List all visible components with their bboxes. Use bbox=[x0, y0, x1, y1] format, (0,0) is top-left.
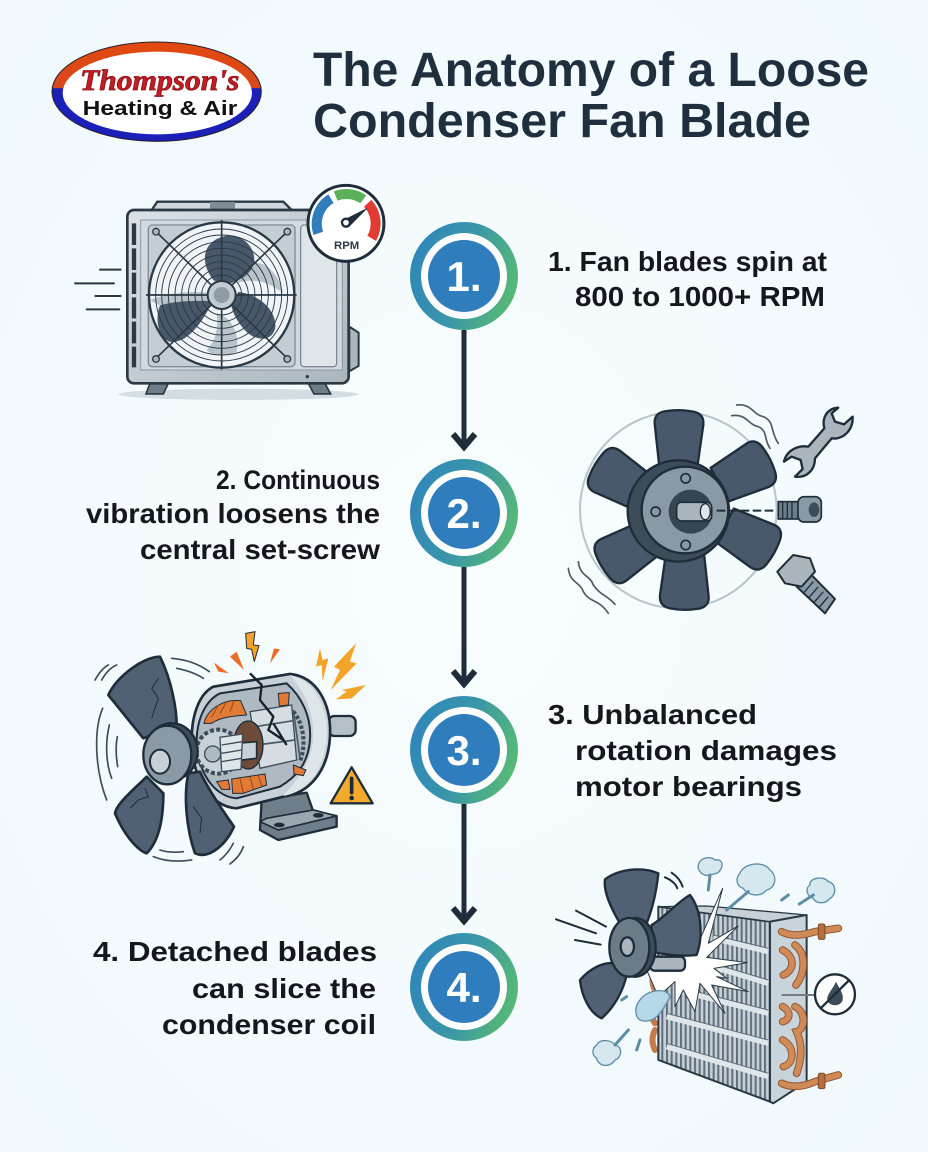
badge 1: 1. bbox=[446, 253, 482, 300]
logo: Thompson's Heating & Air: Thompson's bbox=[80, 64, 239, 97]
detached fan bbox=[580, 869, 701, 1018]
step 3 text bbox=[548, 699, 837, 802]
step 3 text: 3. Unbalanced bbox=[548, 699, 757, 730]
arrow 2 to 3 bbox=[453, 567, 475, 685]
title: Condenser Fan Blade bbox=[313, 95, 811, 148]
badge 2: 2. bbox=[446, 490, 482, 537]
step 4 text: can slice the bbox=[192, 973, 376, 1004]
icon: wrench bbox=[784, 408, 853, 477]
illustration: outdoor AC unit with RPM gauge bbox=[75, 185, 384, 400]
icon: no water leak bbox=[782, 974, 855, 1014]
icon: RPM gauge bbox=[308, 185, 384, 261]
copper pipes bbox=[782, 928, 838, 1086]
icon: warning triangle bbox=[331, 767, 373, 803]
step 2 text: central set-screw bbox=[140, 534, 380, 565]
badge 4: 4. bbox=[446, 964, 482, 1011]
step 2 text: vibration loosens the bbox=[86, 498, 380, 529]
icon: hex bolt bbox=[777, 555, 835, 613]
step 3 text: motor bearings bbox=[575, 771, 802, 802]
step 4 text: 4. Detached blades bbox=[93, 936, 377, 967]
step 2 text: 2. Continuous bbox=[216, 465, 380, 495]
step 4 text bbox=[93, 936, 377, 1040]
burst impact bbox=[647, 888, 748, 1013]
water spray and steam puffs bbox=[593, 858, 835, 1065]
logo: Thompson's Heating & Air bbox=[52, 42, 261, 141]
illustration: six-blade fan with loose set-screw bbox=[568, 405, 853, 613]
logo: Thompson's Heating & Air: Heating & Air bbox=[83, 97, 237, 120]
badge 3: 3. bbox=[446, 727, 482, 774]
illustration: detached fan slicing condenser coil bbox=[556, 858, 855, 1103]
step 2 text bbox=[86, 465, 380, 565]
badge 3 bbox=[410, 696, 518, 804]
badge 4 bbox=[410, 933, 518, 1041]
step 1 text: 1. Fan blades spin at bbox=[548, 246, 827, 277]
badge 1 bbox=[410, 222, 518, 330]
step 1 text bbox=[548, 246, 827, 312]
step 4 text: condenser coil bbox=[162, 1009, 376, 1040]
step 3 text: rotation damages bbox=[575, 735, 837, 766]
title: The Anatomy of a Loose bbox=[313, 44, 869, 97]
icon: lightning bolts bbox=[246, 632, 366, 699]
icon: set-screw bbox=[778, 497, 821, 522]
arrow 1 to 2 bbox=[453, 330, 475, 448]
badge 2 bbox=[410, 459, 518, 567]
icon: RPM gauge: RPM bbox=[334, 240, 359, 252]
step 1 text: 800 to 1000+ RPM bbox=[575, 281, 825, 312]
title bbox=[313, 44, 869, 148]
arrow 3 to 4 bbox=[453, 804, 475, 922]
illustration: damaged motor with cracked fan bbox=[95, 632, 373, 864]
